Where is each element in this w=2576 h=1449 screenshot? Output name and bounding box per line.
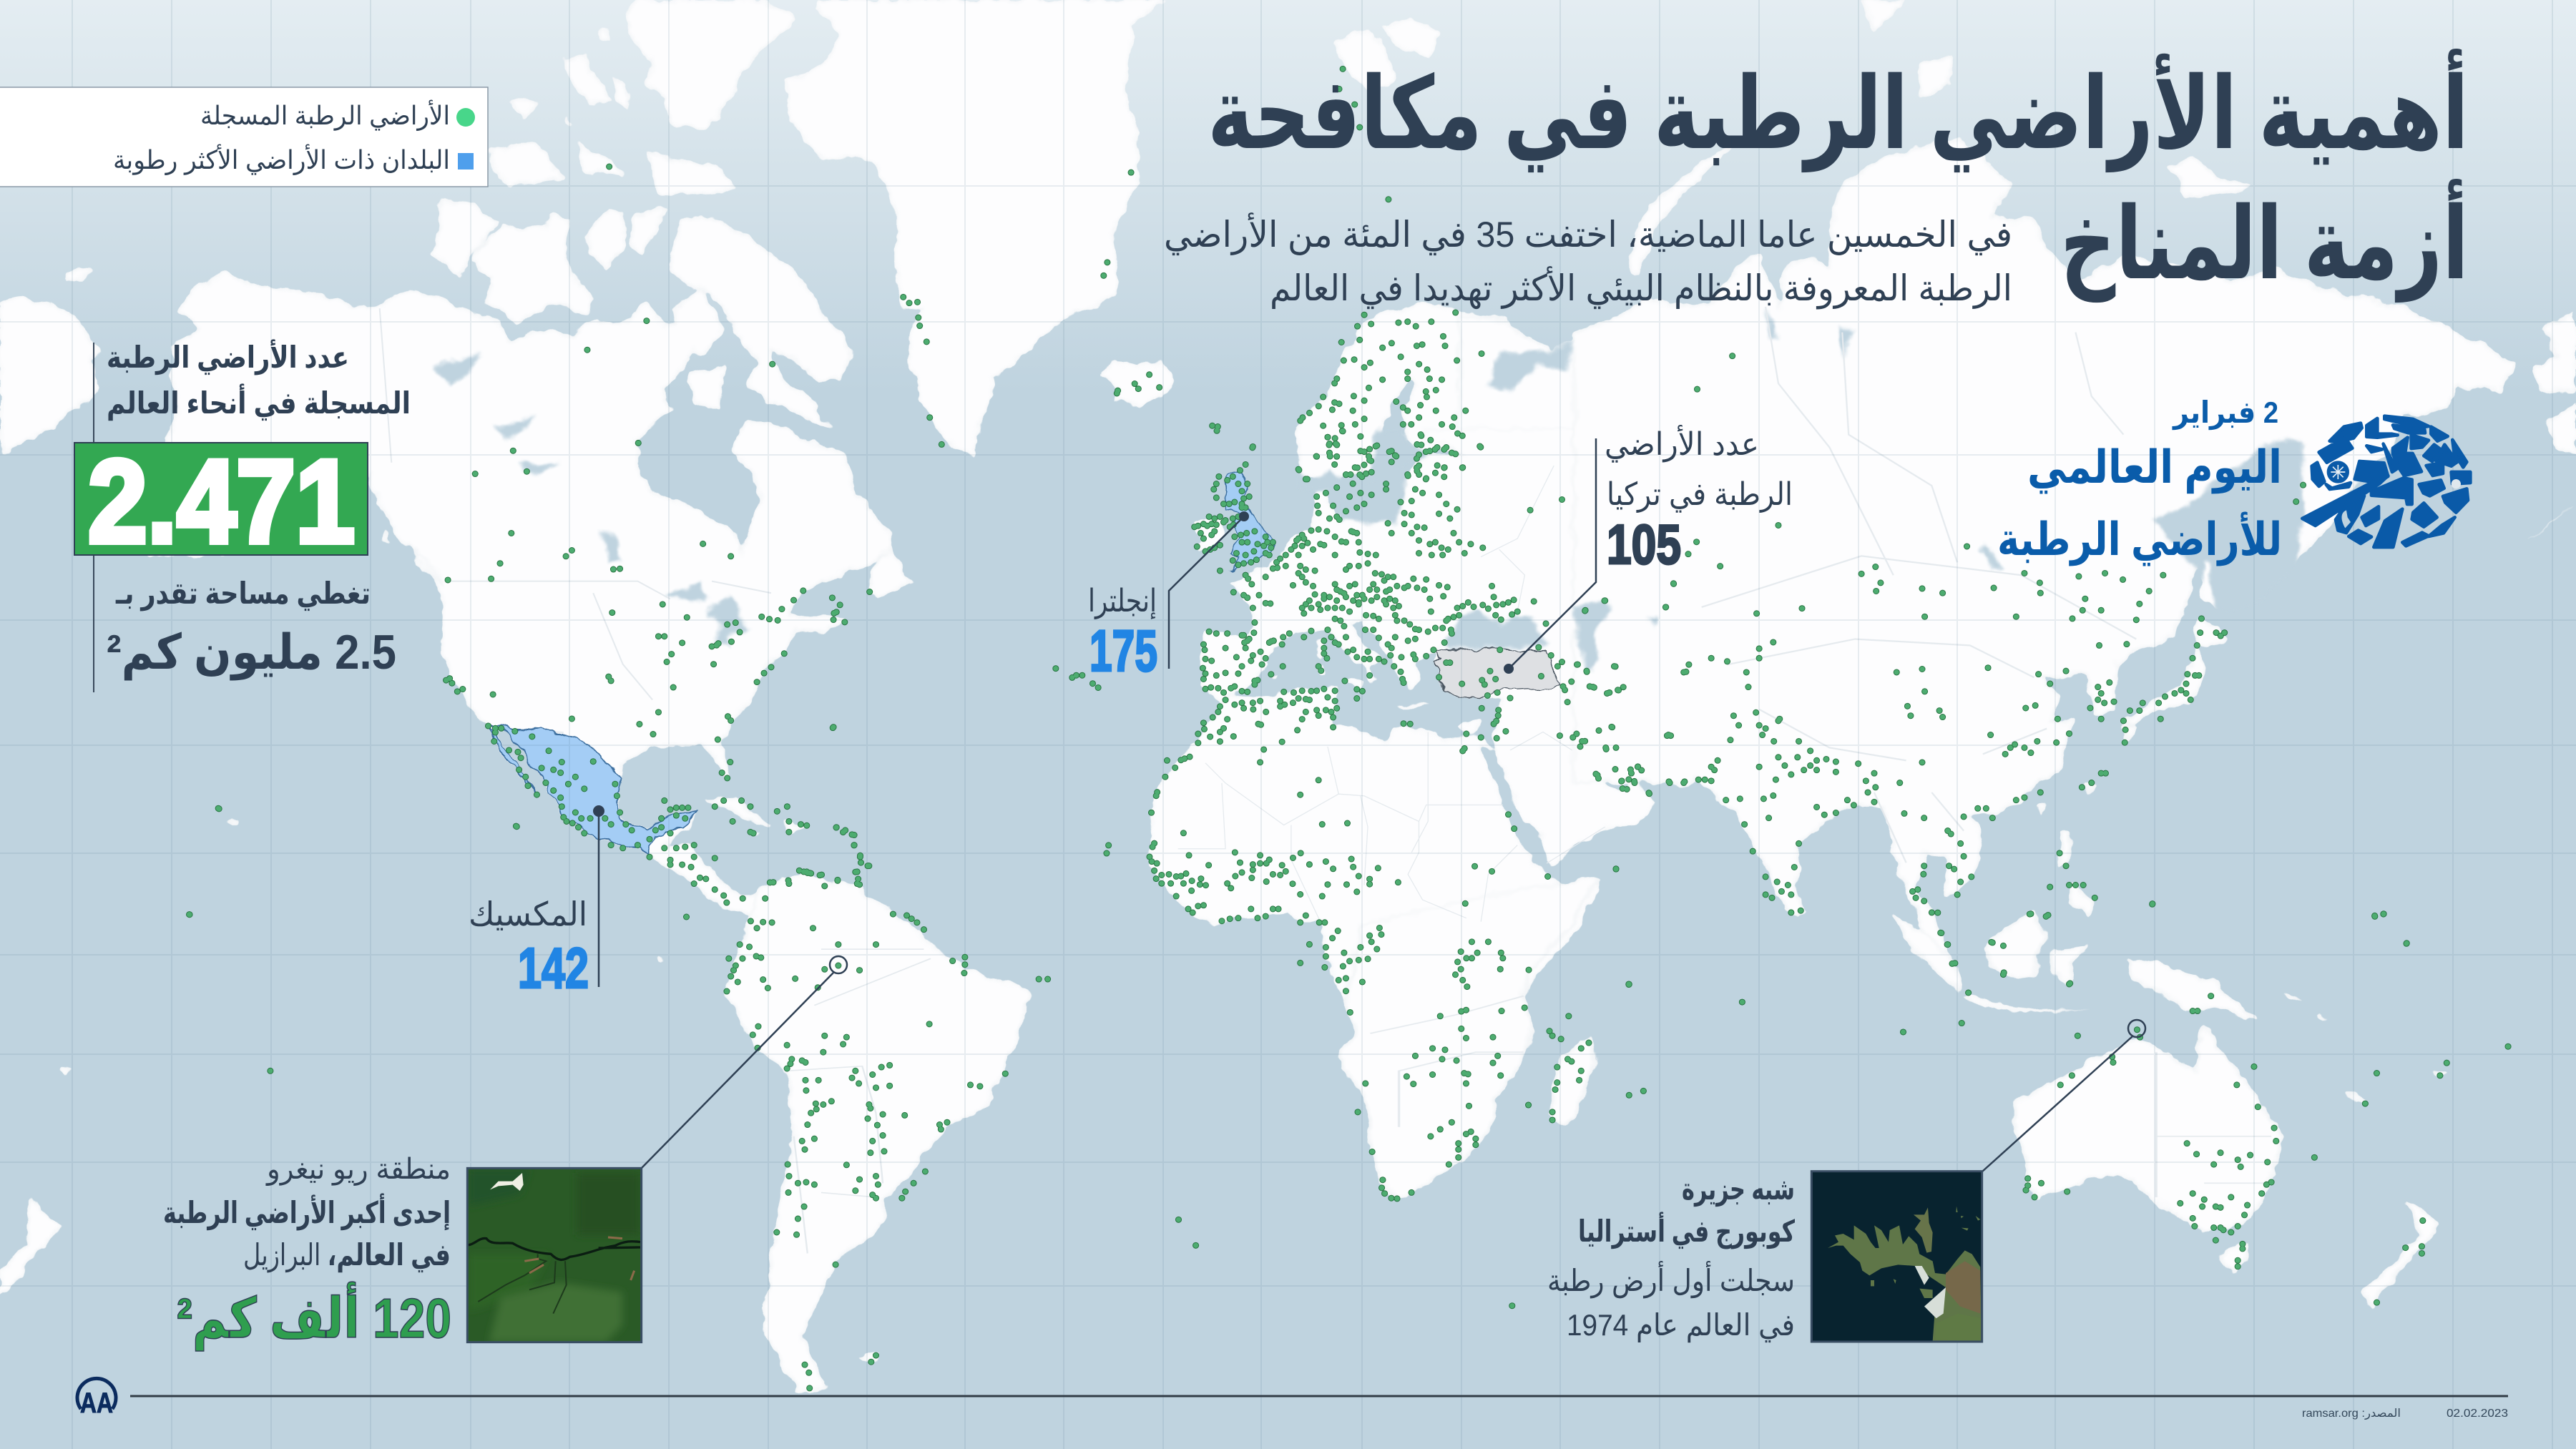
land: greenland	[787, 0, 1166, 456]
date: 02.02.2023	[2447, 1408, 2508, 1420]
inland and enclosed seas	[433, 307, 2303, 674]
highlighted country: mexico	[489, 724, 695, 854]
value: 120 ألف كم²	[177, 1282, 451, 1351]
land: scandinavia and finland	[1296, 303, 1502, 477]
description: سجلت أول أرض رطبة	[1547, 1261, 1795, 1298]
heading: عدد الأراضي الرطبة	[107, 339, 349, 375]
pin	[593, 805, 604, 817]
satellite thumbnail	[1811, 1172, 1982, 1342]
leader line and target ring	[642, 956, 847, 1168]
area value: 2.5 مليون كم²	[107, 625, 396, 681]
world wetlands day block	[1997, 396, 2282, 566]
title	[1208, 49, 2469, 303]
source: المصدر: ramsar.org	[2302, 1408, 2401, 1420]
land: svalbard	[1335, 19, 1439, 92]
label: المكسيك	[469, 895, 587, 933]
description line two: في العالم، البرازيل	[243, 1238, 451, 1273]
footer rule	[130, 1395, 2508, 1398]
day name line two: للأراضي الرطبة	[1997, 512, 2282, 566]
label: إنجلترا	[1088, 584, 1157, 619]
land: baja california	[489, 727, 537, 797]
leader line	[598, 811, 599, 987]
callout: england	[1088, 511, 1249, 684]
legend	[0, 87, 488, 187]
land: iceland	[1102, 360, 1172, 406]
leader line	[1509, 438, 1596, 669]
vertical rule	[93, 343, 94, 692]
land: sakhalin	[2203, 562, 2213, 607]
legend: green circle	[456, 108, 475, 127]
place name: شبه جزيرة	[1682, 1172, 1795, 1207]
land: australia	[2012, 1026, 2281, 1232]
label line two: الرطبة في تركيا	[1607, 477, 1793, 513]
land: sumatra java borneo sulawesi philippines	[1792, 783, 2449, 1106]
heading line two: المسجلة في أنحاء العالم	[107, 383, 411, 421]
callout: rio negro	[163, 956, 847, 1351]
logo: anadolu agency: AA	[80, 1387, 113, 1419]
subtitle line one: في الخمسين عاما الماضية، اختفت 35 في المئة من الأراضي	[1164, 212, 2012, 255]
legend: blue square	[458, 153, 474, 170]
highlighted country: united kingdom	[1225, 473, 1275, 569]
callout: turkey	[1504, 424, 1793, 674]
label: عدد الأراضي	[1605, 424, 1759, 463]
pin	[1504, 664, 1514, 674]
icon: world wetlands day logo	[2302, 416, 2470, 547]
land: ireland	[1195, 515, 1224, 549]
leader line	[1169, 516, 1244, 669]
land: mediterranean islands	[1269, 641, 1481, 734]
day name: اليوم العالمي	[2027, 441, 2282, 494]
value: 175	[1089, 619, 1157, 684]
land: chukotka	[0, 297, 101, 453]
value: 105	[1607, 513, 1681, 576]
description line two: في العالم عام 1974	[1567, 1308, 1795, 1343]
land: africa north	[1147, 688, 1600, 1001]
land: north and central america	[148, 272, 893, 919]
stats panel: total wetlands	[74, 339, 411, 692]
land: tasmania	[2218, 1244, 2248, 1274]
description: إحدى أكبر الأراضي الرطبة	[163, 1193, 451, 1231]
callout: mexico	[469, 805, 604, 1000]
land: newfoundland and vancouver	[386, 528, 911, 599]
date: 2 فبراير	[2172, 396, 2278, 431]
number: 2.471	[88, 436, 355, 567]
land: madagascar	[1552, 1038, 1595, 1127]
land: japan sakhalin and arctic russian islands	[1628, 0, 2576, 815]
callout: cobourg peninsula	[1547, 1020, 2145, 1343]
subtitle line two: الرطبة المعروفة بالنظام البيئي الأكثر تهديدا في العالم	[1270, 266, 2012, 310]
legend: countries with most wetlands: البلدان ذات الأراضي الأكثر رطوبة	[113, 144, 450, 175]
land: new guinea	[2127, 958, 2257, 1022]
land: south america	[725, 874, 1030, 1391]
land: africa south	[1341, 877, 1600, 1199]
logo: anadolu agency	[77, 1378, 116, 1419]
land: europe and west asia	[1200, 429, 1688, 869]
land: new zealand	[2362, 1199, 2439, 1307]
land: caribbean islands	[706, 797, 810, 835]
land: northwest russia	[1459, 315, 1581, 436]
legend: registered wetlands: الأراضي الرطبة المسجلة	[200, 99, 450, 131]
subtitle	[1164, 212, 2012, 310]
area caption: تغطي مساحة تقدر بـ	[115, 576, 371, 611]
place name: منطقة ريو نيغرو	[265, 1154, 451, 1186]
country borders and rivers, faint	[380, 307, 2271, 1253]
pin	[1239, 511, 1249, 521]
highlighted country: turkey	[1435, 648, 1557, 697]
land: asia	[1574, 137, 2517, 952]
land: arctic islands of canada	[65, 0, 854, 427]
land: south pacific and falkland islands	[0, 818, 879, 1363]
value: 142	[518, 936, 589, 1000]
place name line two: كوبورج في أستراليا	[1578, 1212, 1795, 1249]
leader line and target ring	[1982, 1020, 2145, 1172]
satellite thumbnail	[467, 1168, 642, 1342]
land: hawaii	[228, 820, 238, 825]
green number box	[74, 443, 368, 555]
